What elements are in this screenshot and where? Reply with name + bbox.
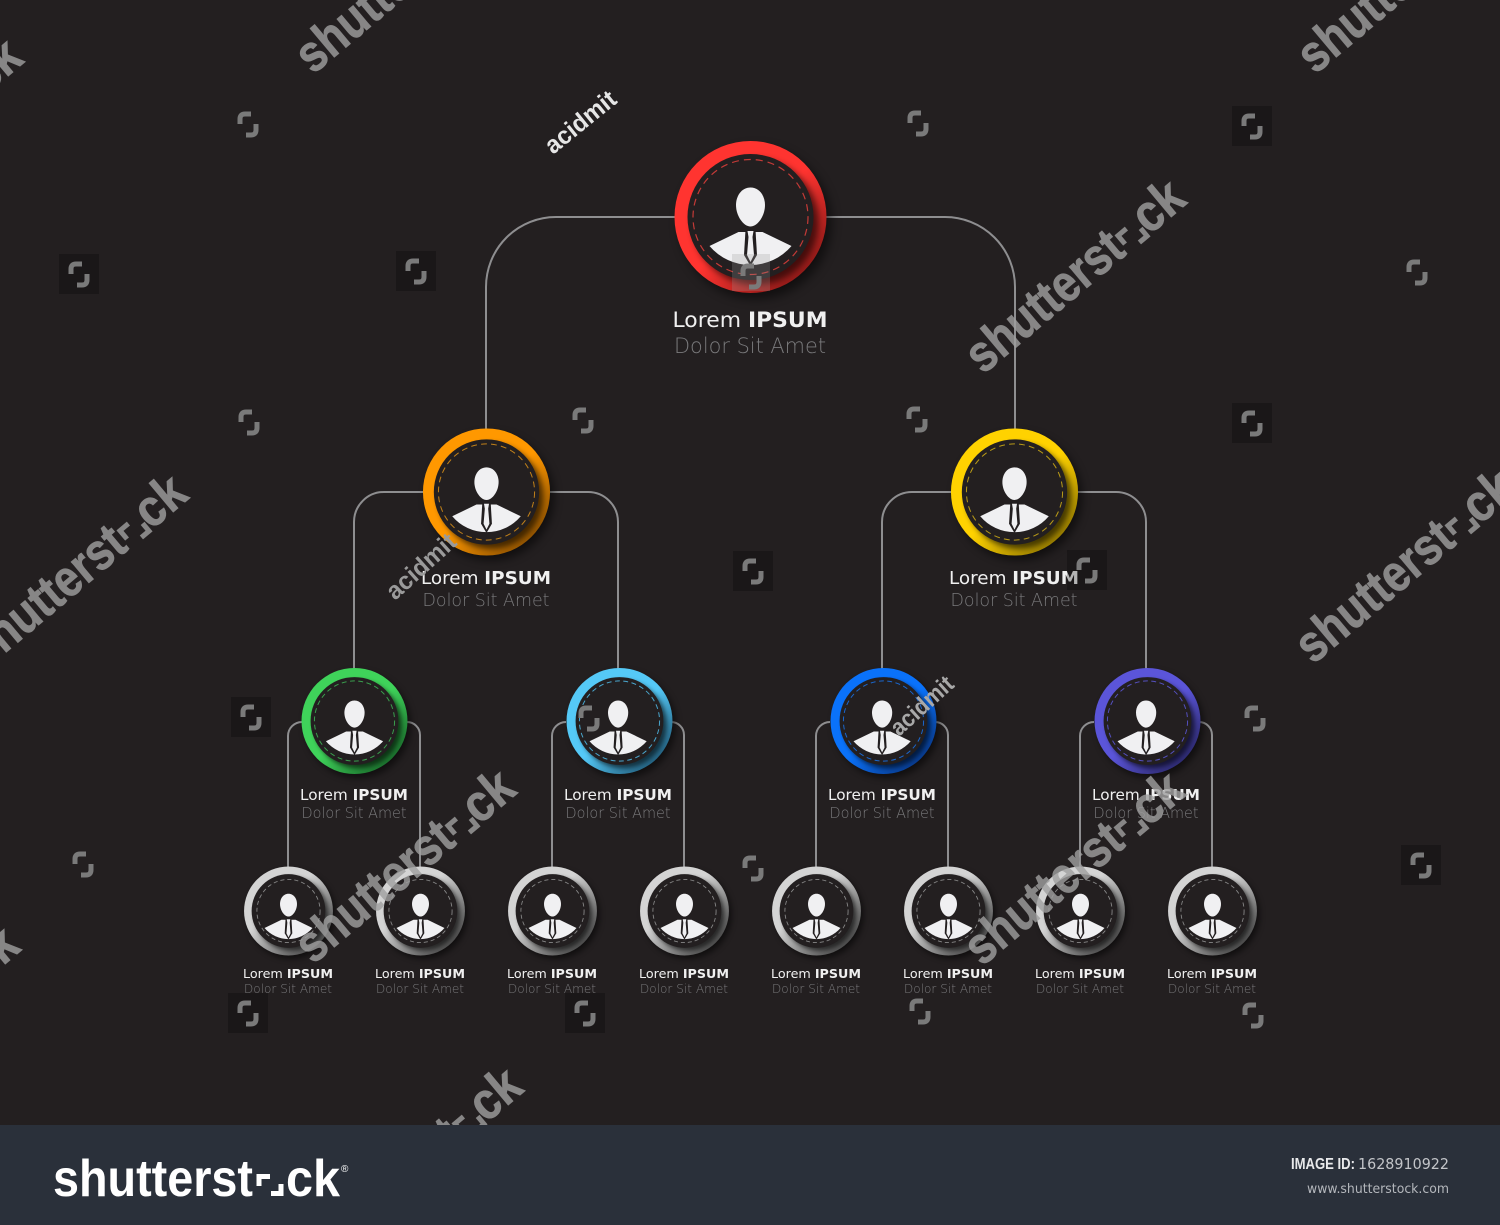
label: gray 3: Lorem IPSUM — [507, 966, 597, 981]
node: gray 8 — [1168, 867, 1260, 959]
node: gray 5 — [772, 867, 864, 959]
watermark: acidmit right: acidmit — [885, 671, 959, 741]
node: top red — [674, 141, 832, 299]
watermark: shutterstock center right: ck — [1119, 759, 1195, 837]
image id: 1628910922 — [1358, 1155, 1449, 1173]
label: gray 4: Dolor Sit Amet — [640, 981, 728, 996]
label: blue — [828, 786, 936, 822]
image id — [1291, 1155, 1449, 1173]
node: yellow — [951, 428, 1082, 561]
image id: IMAGE ID: — [1291, 1156, 1355, 1173]
watermark: shutterstock upper right: ck — [1120, 167, 1196, 245]
label: gray 2: Lorem IPSUM — [375, 966, 465, 981]
label: gray 5 — [771, 966, 861, 996]
website url: www.shutterstock.com — [1307, 1181, 1449, 1197]
label: top: Lorem IPSUM — [672, 308, 828, 332]
label: purple: Dolor Sit Amet — [1094, 804, 1199, 822]
label: gray 4: Lorem IPSUM — [639, 966, 729, 981]
label: gray 5: Lorem IPSUM — [771, 966, 861, 981]
label: top: Dolor Sit Amet — [674, 334, 826, 358]
watermark: shutterstock center left: ck — [450, 757, 526, 835]
node: light blue — [567, 668, 676, 778]
node: gray 4 — [640, 867, 732, 959]
label: gray 8: Lorem IPSUM — [1167, 966, 1257, 981]
node: gray 7 — [1036, 867, 1128, 959]
label: gray 7: Dolor Sit Amet — [1036, 981, 1124, 996]
label: yellow: Lorem IPSUM — [949, 568, 1079, 589]
label: purple: Lorem IPSUM — [1092, 786, 1200, 804]
label: gray 8 — [1167, 966, 1257, 996]
watermark: acidmit left: acidmit — [380, 527, 463, 605]
label: orange: Dolor Sit Amet — [422, 590, 550, 611]
node: gray 2 — [376, 867, 468, 959]
label: gray 3 — [507, 966, 597, 996]
node: gray 3 — [508, 867, 600, 959]
label: blue: Dolor Sit Amet — [830, 804, 935, 822]
footer logo: shutterst — [53, 1150, 253, 1208]
footer bar — [0, 1125, 1500, 1225]
watermark: shutterstock right: shutterst — [1283, 508, 1465, 674]
node: gray 6 — [904, 867, 996, 959]
label: gray 7 — [1035, 966, 1125, 996]
label: light blue: Dolor Sit Amet — [566, 804, 671, 822]
watermark brackets — [59, 106, 1441, 1033]
label: gray 5: Dolor Sit Amet — [772, 981, 860, 996]
watermark: shutterstock center right: shutterst — [952, 810, 1134, 976]
label: gray 1 — [243, 966, 333, 996]
node: orange — [423, 428, 554, 561]
label: gray 6 — [903, 966, 993, 996]
watermark: shutterstock center left: shutterst — [283, 808, 465, 974]
label: gray 2 — [375, 966, 465, 996]
label: gray 8: Dolor Sit Amet — [1168, 981, 1256, 996]
label: yellow: Dolor Sit Amet — [950, 590, 1078, 611]
label: gray 6: Dolor Sit Amet — [904, 981, 992, 996]
node: green — [302, 668, 411, 778]
watermark: shutterstock upper right: shutterst — [953, 218, 1135, 384]
footer logo: ck — [286, 1150, 340, 1208]
label: orange — [421, 568, 551, 611]
node: gray 1 — [244, 867, 336, 959]
label: green: Dolor Sit Amet — [302, 804, 407, 822]
label: gray 4 — [639, 966, 729, 996]
footer logo: ® — [341, 1164, 349, 1175]
watermark: shutterstock left: ck — [122, 462, 198, 540]
label: orange: Lorem IPSUM — [421, 568, 551, 589]
label: gray 2: Dolor Sit Amet — [376, 981, 464, 996]
connector lines — [288, 217, 1212, 868]
watermark: acidmit top: acidmit — [539, 85, 623, 160]
label: gray 1: Lorem IPSUM — [243, 966, 333, 981]
label: green: Lorem IPSUM — [300, 786, 408, 804]
node: purple — [1095, 668, 1204, 778]
label: gray 7: Lorem IPSUM — [1035, 966, 1125, 981]
label: green — [300, 786, 408, 822]
label: purple — [1092, 786, 1200, 822]
label: top — [672, 308, 828, 358]
label: gray 1: Dolor Sit Amet — [244, 981, 332, 996]
node: blue — [831, 668, 940, 778]
label: gray 3: Dolor Sit Amet — [508, 981, 596, 996]
label: light blue — [564, 786, 672, 822]
watermark: shutterstock bottom: ck — [457, 1055, 533, 1133]
label: yellow — [949, 568, 1079, 611]
label: gray 6: Lorem IPSUM — [903, 966, 993, 981]
label: light blue: Lorem IPSUM — [564, 786, 672, 804]
label: blue: Lorem IPSUM — [828, 786, 936, 804]
